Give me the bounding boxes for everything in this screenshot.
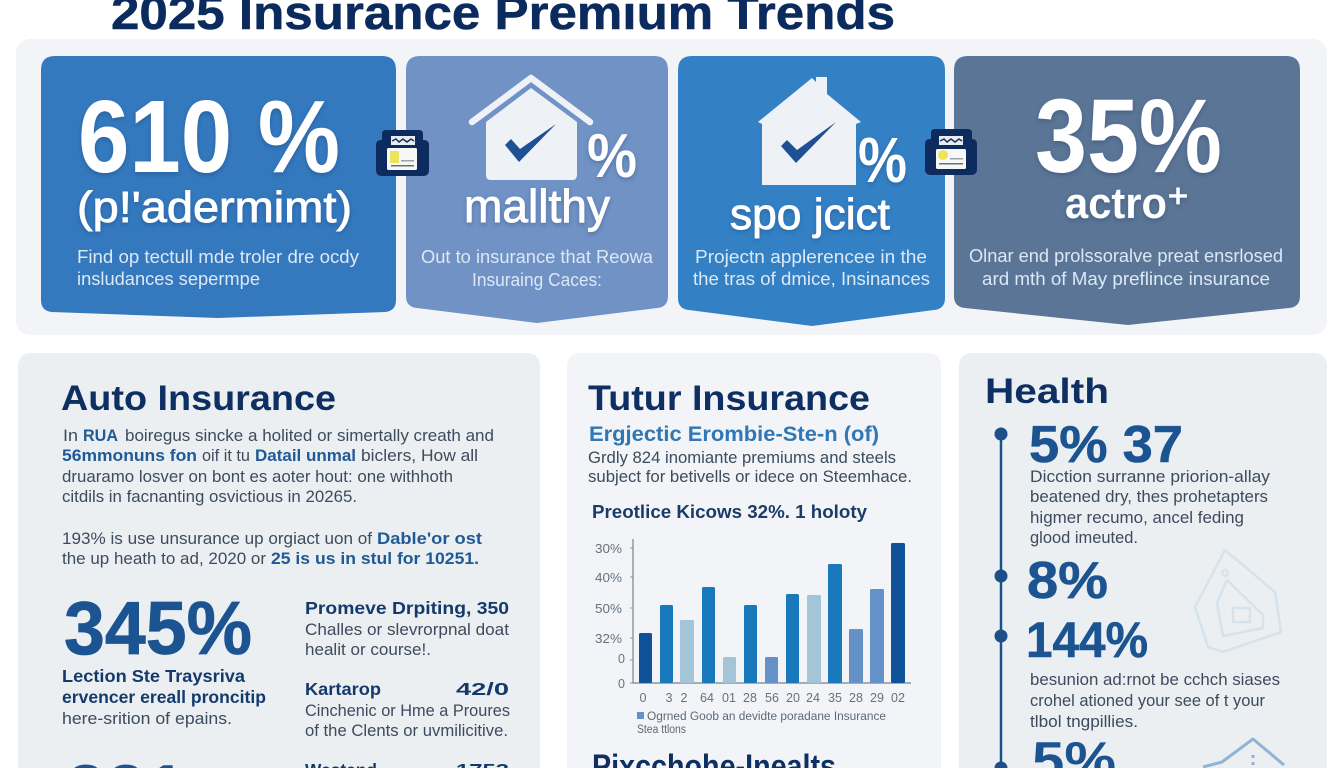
icon: bottom house outline	[1203, 739, 1284, 768]
x axis labels: 29	[870, 691, 884, 705]
card: healthy stat	[406, 56, 668, 323]
list item: promeve drpiting: Promeve Drpiting, 350	[305, 598, 509, 618]
list item: clipped bottom row	[305, 760, 509, 768]
text block: auto intro	[62, 427, 494, 506]
text block: health first: beatened dry, thes prohetapters	[1030, 488, 1268, 506]
card: project stat: %	[858, 124, 907, 196]
chart legend: Ogrned Goob an devidte poradane Insurance	[647, 711, 886, 723]
list item: promeve drpiting	[305, 598, 509, 659]
text block: auto intro: Datail unmal	[255, 447, 356, 465]
stat: 345 percent: here-srition of epains.	[62, 710, 232, 728]
text block: auto detail: 25 is us in stul for 10251.	[271, 550, 479, 568]
icon: briefcase left	[376, 130, 429, 176]
card: premium stat	[41, 56, 396, 318]
panel: health	[959, 353, 1327, 768]
card: 35 percent stat: 35%	[1035, 78, 1222, 195]
stat: 345 percent: 345%	[64, 586, 252, 670]
icon: house with check	[472, 78, 590, 180]
card: premium stat: 610 %	[78, 79, 340, 194]
card: healthy stat: Insuraing Caces:	[472, 270, 602, 290]
stat: 8 percent: 8%	[1027, 552, 1108, 610]
text block: health first: glood imeuted.	[1030, 529, 1138, 547]
text block: health first	[1030, 468, 1271, 547]
panel: top summary strip	[16, 39, 1327, 335]
card: healthy stat: mallthy	[464, 180, 610, 232]
text block: auto intro: druaramo losver on bont es aoter hout: one withhoth	[62, 468, 453, 486]
panel: tutur insurance	[567, 353, 941, 768]
list item: kartarop	[305, 679, 510, 740]
card: healthy stat: %	[587, 122, 637, 191]
list item: kartarop: Kartarop	[305, 679, 381, 699]
y axis labels	[595, 542, 625, 691]
chart legend: Stea ttlons	[637, 724, 686, 736]
bar chart	[595, 539, 911, 705]
text block: health first: Dicction surranne priorion-allay	[1030, 468, 1271, 486]
x axis labels: 28	[849, 691, 863, 705]
card: premium stat: (p!'adermimt)	[77, 183, 352, 232]
icon: faint house tag	[1195, 550, 1281, 652]
heading: tutur insurance: Tutur Insurance	[588, 379, 870, 418]
list item: kartarop: 42/0	[456, 679, 509, 699]
card: 35 percent stat	[954, 56, 1300, 325]
card: project stat: the tras of dmice, Insinances	[693, 269, 930, 289]
text block: health second	[1030, 671, 1280, 731]
text block: tutur description	[588, 449, 912, 486]
card: healthy stat: Out to insurance that Reowa	[421, 247, 654, 267]
chart title: Preotlice Kicows 32%. 1 holoty	[592, 501, 868, 522]
card: project stat: spo jcict	[730, 190, 890, 239]
text block: auto detail: Dable'or ost	[377, 530, 483, 548]
text block: health second: crohel ationed your see of t your	[1030, 692, 1265, 710]
y axis labels: 32%	[595, 632, 622, 646]
subheading: Ergjectic Erombie-Ste-n (of)	[589, 423, 879, 446]
bars	[639, 543, 905, 683]
text block: auto intro: biclers, How all	[361, 447, 478, 465]
text block: auto intro: oif it tu	[202, 447, 250, 465]
stat: 345 percent: ervencer ereall proncitip	[62, 687, 266, 707]
x axis labels: 56	[765, 691, 779, 705]
text block: auto intro: boiregus sincke a holited or simertally creath and	[125, 427, 494, 445]
x axis labels: 2	[681, 691, 688, 705]
text block: tutur description: subject for betivells or idece on Steemhace.	[588, 468, 912, 486]
list item: kartarop: Cinchenic or Hme a Proures	[305, 702, 510, 720]
text block: auto intro: 56mmonuns fon	[62, 447, 197, 465]
card: premium stat: insludances sepermpe	[77, 269, 260, 289]
card: 35 percent stat: actro⁺	[1065, 179, 1189, 228]
x axis labels: 24	[806, 691, 820, 705]
x axis labels: 02	[891, 691, 905, 705]
card: project stat	[678, 56, 945, 326]
x axis labels	[640, 691, 905, 705]
x axis labels: 3	[666, 691, 673, 705]
text block: health second: tlbol tngpillies.	[1030, 713, 1138, 731]
timeline	[994, 428, 1008, 768]
x axis labels: 20	[786, 691, 800, 705]
card: 35 percent stat: ard mth of May preflince insurance	[982, 269, 1270, 289]
list item: promeve drpiting: healit or course!.	[305, 641, 431, 659]
y axis labels: 50%	[595, 602, 622, 616]
card: 35 percent stat: Olnar end prolssoralve preat ensrlosed	[969, 246, 1283, 266]
x axis labels: 0	[640, 691, 647, 705]
text block: auto intro: citdils in facnanting osvictious in 20265.	[62, 488, 357, 506]
text block: auto detail: 193% is use unsurance up orgiact uon of	[62, 530, 372, 548]
icon: briefcase right	[925, 129, 977, 175]
heading: auto insurance: Auto Insurance	[61, 379, 336, 418]
list item: promeve drpiting: Challes or slevrorpnal doat	[305, 621, 509, 639]
stat: 345 percent	[62, 586, 266, 728]
x axis labels: 64	[700, 691, 714, 705]
y axis labels: 40%	[595, 571, 622, 585]
text block: auto detail: the up heath to ad, 2020 or	[62, 550, 267, 568]
y axis labels: 30%	[595, 542, 622, 556]
stat: 345 percent: Lection Ste Traysriva	[62, 666, 245, 686]
stat: 5 percent 37: 5% 37	[1029, 416, 1183, 474]
x axis labels: 35	[828, 691, 842, 705]
text block: tutur description: Grdly 824 inomiante premiums and steels	[588, 449, 896, 467]
text block: health first: higmer recumo, ancel feding	[1030, 509, 1244, 527]
heading: health: Health	[985, 372, 1109, 411]
x axis labels: 28	[743, 691, 757, 705]
text block: auto intro: RUA	[83, 427, 118, 445]
text block: auto intro: In	[63, 427, 78, 445]
icon: house with check and chimney	[758, 77, 861, 185]
list item: kartarop: of the Clents or uvmilicitive.	[305, 722, 508, 740]
text block: health second: besunion ad:rnot be cchch siases	[1030, 671, 1280, 689]
y axis labels: 0	[618, 652, 625, 666]
stat: 144 percent: 144%	[1026, 612, 1148, 668]
card: premium stat: Find op tectull mde troler dre ocdy	[77, 247, 359, 267]
text block: auto detail	[62, 530, 483, 568]
panel: auto insurance	[18, 353, 540, 768]
card: project stat: Projectn applerencee in the	[695, 247, 927, 267]
chart legend	[637, 711, 886, 736]
y axis labels: 0	[618, 677, 625, 691]
x axis labels: 01	[722, 691, 736, 705]
